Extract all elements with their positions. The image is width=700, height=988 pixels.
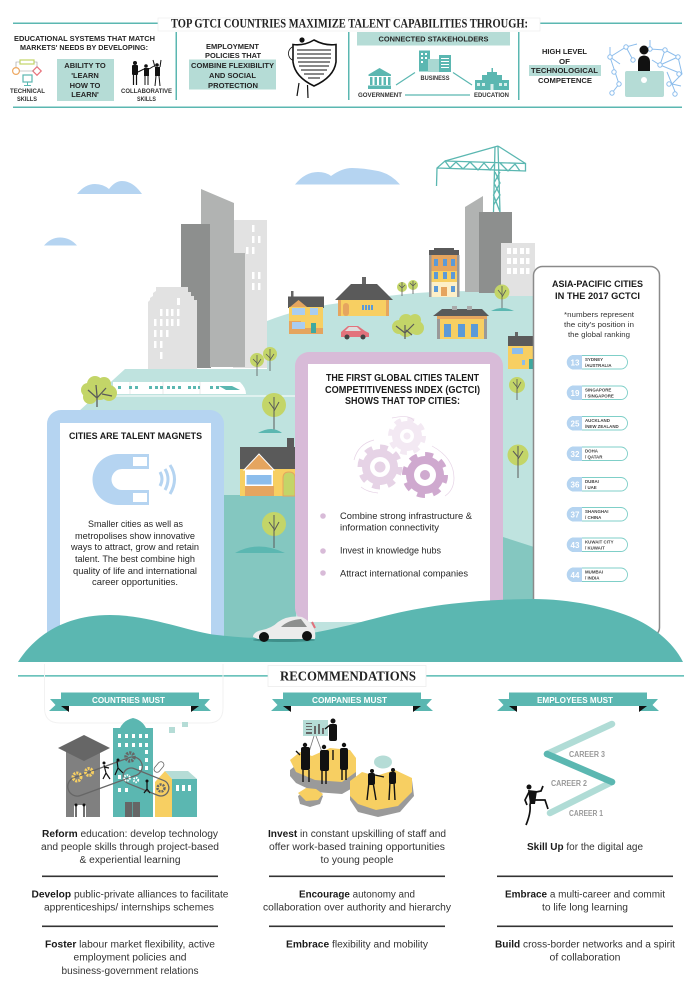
- clouds: [44, 168, 400, 246]
- rank: kuwait city: [567, 538, 628, 552]
- text: employment policies: PROTECTION: [208, 81, 258, 90]
- icon: business buildings: [419, 50, 451, 72]
- heading: connected stakeholders: CONNECTED STAKEHOLDERS: [378, 34, 488, 44]
- label: technical skills: TECHNICAL: [10, 89, 45, 95]
- text: employees must actions: [495, 842, 675, 964]
- hill: pale mint ground: [78, 291, 534, 640]
- list: top city traits: information connectivity: [340, 522, 439, 534]
- rank: sydney: [567, 355, 628, 370]
- callout: ability to learn how to learn: LEARN': [71, 90, 99, 99]
- text: employment policies: EMPLOYMENT: [206, 42, 259, 51]
- rank: shanghai: 37: [571, 510, 580, 519]
- note: *numbers represent: [564, 310, 635, 319]
- rank: kuwait city: 43: [571, 541, 580, 550]
- text: companies must actions: collaboration over authority and hierarchy: [263, 902, 451, 914]
- ribbon: companies must: [271, 692, 433, 712]
- rank: shanghai: / CHINA: [585, 515, 602, 520]
- text: magnets description: career opportunities.: [92, 577, 178, 588]
- text: companies must actions: Invest in constant upskilling of staff and: [268, 829, 446, 840]
- rank: dubai: DUBAI: [585, 479, 599, 484]
- rank: kuwait city: KUWAIT CITY: [585, 540, 614, 544]
- panel: first global cities talent competitiveness index: [295, 352, 503, 622]
- icon: collaborative people: [132, 60, 161, 86]
- text: educational systems: [14, 34, 155, 52]
- text: countries must actions: [32, 829, 229, 977]
- rank: doha: / QATAR: [585, 454, 603, 460]
- car: red: [341, 326, 369, 340]
- skyscrapers: right cluster: [465, 196, 535, 296]
- text: employees must actions: Build cross-border networks and a spirit: [495, 940, 675, 950]
- heading: [552, 279, 643, 301]
- icon: person at laptop with network: [608, 40, 682, 97]
- rank: singapore: 19: [571, 389, 580, 398]
- rank: singapore: [567, 386, 628, 400]
- text: employment policies: AND SOCIAL: [209, 71, 256, 80]
- callout: ability to learn how to learn: 'LEARN: [71, 71, 99, 80]
- heading: COMPETITIVENESS INDEX (GCTCI): [325, 385, 480, 396]
- label: government: GOVERNMENT: [358, 93, 402, 99]
- heading: connected stakeholders: [357, 32, 510, 46]
- text: magnets description: metropolises show innovative: [75, 531, 195, 542]
- heading: IN THE 2017 GCTCI: [555, 291, 640, 301]
- rank: doha: [567, 446, 628, 461]
- rank: auckland: AUCKLAND: [585, 418, 610, 423]
- illustration: countries education to industry: [58, 718, 197, 817]
- text: countries must actions: and people skills through project-based: [41, 842, 219, 853]
- rank: singapore: / SINGAPORE: [585, 394, 614, 398]
- icon: government building: [368, 68, 391, 89]
- text: employment policies: POLICIES THAT: [205, 51, 261, 60]
- rank: kuwait city: / KUWAIT: [585, 546, 605, 550]
- rank: sydney: 13: [571, 358, 580, 367]
- houses: [240, 248, 534, 496]
- text: technological competence: TECHNOLOGICAL: [531, 66, 598, 75]
- rank: doha: 32: [571, 450, 580, 459]
- heading: ASIA-PACIFIC CITIES: [552, 279, 643, 289]
- list: top city traits: Attract international companies: [340, 568, 468, 580]
- rank: dubai: [567, 477, 628, 492]
- text: educational systems: MARKETS' NEEDS BY DEVELOPING:: [20, 43, 148, 52]
- rank: sydney: SYDNEY: [585, 357, 603, 362]
- rank: singapore: SINGAPORE: [585, 388, 611, 392]
- text: countries must actions: & experiential learning: [80, 855, 180, 866]
- car: white: [253, 617, 315, 642]
- text: employees must actions: Skill Up for the digital age: [527, 842, 643, 853]
- text: companies must actions: offer work-based training opportunities: [269, 842, 445, 853]
- rank: mumbai: MUMBAI: [585, 570, 603, 574]
- note: [564, 310, 635, 339]
- note: the city's position in: [564, 320, 634, 329]
- list: top city traits: Invest in knowledge hubs: [340, 546, 441, 556]
- rank: mumbai: 44: [571, 571, 580, 580]
- text: employees must actions: of collaboration: [550, 952, 620, 964]
- section: top header capabilities: [10, 16, 682, 108]
- label: collaborative skills: SKILLS: [137, 97, 156, 103]
- icon: magnet: [92, 454, 174, 505]
- label: technical skills: [10, 89, 45, 103]
- text: countries must actions: employment policies and: [74, 952, 186, 964]
- callout: ability to learn how to learn: HOW TO: [70, 81, 101, 90]
- label: education: EDUCATION: [474, 93, 509, 99]
- rank: sydney: /AUSTRALIA: [585, 363, 612, 368]
- rank: auckland: /NEW ZEALAND: [585, 424, 619, 429]
- text: countries must actions: Reform education: develop technology: [42, 829, 218, 840]
- text: magnets description: ways to attract, grow and retain: [70, 542, 199, 553]
- text: companies must actions: [263, 829, 451, 950]
- label: technical skills: SKILLS: [17, 97, 37, 103]
- icon: gears: [354, 417, 454, 496]
- rank: mumbai: / INDIA: [585, 576, 600, 580]
- train: [113, 382, 296, 396]
- note: the global ranking: [568, 330, 630, 339]
- text: technological competence: COMPETENCE: [538, 76, 592, 85]
- rank: shanghai: [567, 507, 628, 522]
- text: countries must actions: Foster labour market flexibility, active: [45, 940, 215, 950]
- heading: [268, 666, 426, 686]
- ribbon: countries must: [49, 692, 211, 712]
- illustration: employees career path: CAREER 2: [551, 779, 587, 788]
- text: companies must actions: Embrace flexibility and mobility: [286, 940, 428, 950]
- panel: cities are talent magnets: [47, 410, 224, 653]
- text: technological competence: [529, 47, 601, 85]
- rank: auckland: [567, 416, 628, 430]
- callout: ability to learn how to learn: [57, 59, 114, 101]
- illustration: employees career path: CAREER 1: [569, 809, 603, 818]
- text: employees must actions: to life long learning: [542, 902, 628, 914]
- heading: THE FIRST GLOBAL CITIES TALENT: [326, 373, 479, 384]
- illustration: employees career path: [525, 724, 612, 825]
- rank: dubai: / UAE: [585, 485, 597, 490]
- ribbon: employees must: EMPLOYEES MUST: [537, 695, 614, 705]
- text: magnets description: [70, 519, 199, 588]
- rank: doha: DOHA: [585, 448, 599, 454]
- ribbon: countries must: COUNTRIES MUST: [92, 695, 166, 705]
- icon: shield with legs: [288, 37, 336, 98]
- text: countries must actions: Develop public-private alliances to facilitate: [32, 890, 229, 900]
- icon: technical skills: [13, 60, 41, 86]
- heading: [325, 373, 480, 407]
- text: educational systems: EDUCATIONAL SYSTEMS THAT MATCH: [14, 34, 155, 43]
- text: magnets description: Smaller cities as well as: [88, 519, 183, 530]
- list: top city traits: [320, 511, 473, 580]
- text: employees must actions: Embrace a multi-career and commit: [505, 890, 665, 900]
- text: technological competence: HIGH LEVEL: [542, 47, 587, 56]
- ribbon: employees must: [497, 692, 659, 712]
- crane: [436, 146, 526, 212]
- hill: foreground teal: [18, 599, 683, 662]
- text: companies must actions: to young people: [320, 855, 394, 866]
- title: TOP GTCI COUNTRIES MAXIMIZE TALENT CAPABILITIES THROUGH:: [171, 16, 528, 30]
- trees: [81, 280, 528, 553]
- heading: RECOMMENDATIONS: [280, 670, 416, 684]
- text: technological competence: OF: [559, 57, 570, 66]
- text: countries must actions: business-government relations: [62, 966, 198, 977]
- ribbon: companies must: COMPANIES MUST: [312, 695, 388, 705]
- skyscrapers: left cluster: [148, 189, 267, 369]
- label: collaborative skills: [121, 89, 172, 103]
- text: magnets description: talent. The best combine high: [75, 554, 195, 565]
- connectors: stakeholders: [396, 72, 472, 95]
- text: companies must actions: Encourage autonomy and: [299, 890, 415, 900]
- text: magnets description: quality of life and international: [73, 566, 197, 577]
- label: business: BUSINESS: [420, 76, 450, 82]
- illustration: employees career path: CAREER 3: [569, 750, 605, 759]
- label: collaborative skills: COLLABORATIVE: [121, 89, 172, 95]
- section: recommendations: [18, 664, 684, 977]
- list: top city traits: Combine strong infrastructure &: [340, 511, 473, 522]
- text: employment policies: [189, 42, 276, 90]
- heading: CITIES ARE TALENT MAGNETS: [69, 431, 202, 441]
- icon: education building: [475, 68, 509, 90]
- rank: shanghai: SHANGHAI: [585, 509, 608, 514]
- rank: dubai: 36: [571, 480, 580, 489]
- panel: asia-pacific cities: [534, 266, 660, 636]
- callout: ability to learn how to learn: ABILITY TO: [64, 61, 106, 70]
- rank: auckland: 25: [571, 419, 580, 428]
- illustration: companies people on gears: [290, 718, 414, 817]
- scene: city landscape: [44, 146, 535, 640]
- heading: SHOWS THAT TOP CITIES:: [345, 396, 460, 407]
- rank: mumbai: [567, 568, 628, 582]
- text: countries must actions: apprenticeships/ internships schemes: [44, 902, 214, 914]
- text: employment policies: COMBINE FLEXIBILITY: [191, 61, 274, 70]
